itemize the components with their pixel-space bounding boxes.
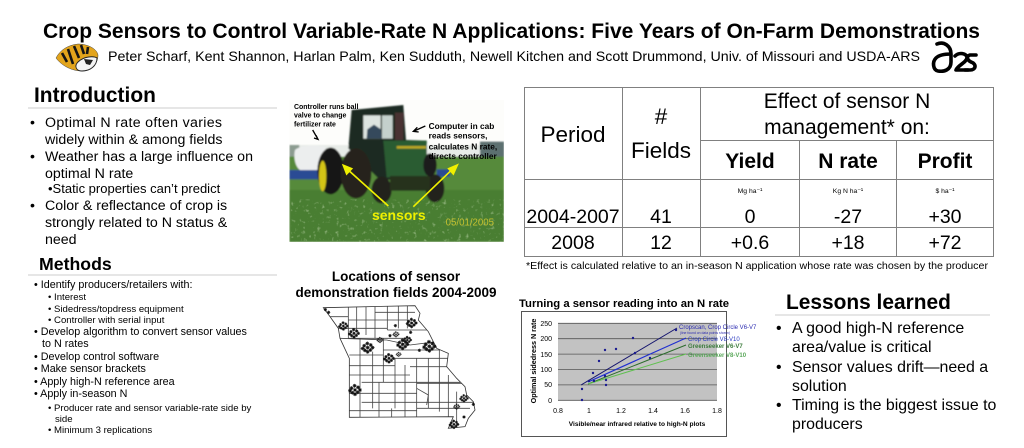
- table headers: #: [655, 104, 668, 129]
- table data: 12: [650, 232, 672, 254]
- methods text: • Producer rate and sensor variable-rate side by: [48, 403, 252, 414]
- chart: N rate vs sensor reading: 1: [587, 408, 591, 415]
- heading: introduction: Introduction: [34, 84, 156, 107]
- introduction text: optimal N rate: [45, 166, 133, 182]
- title: Crop Sensors to Control Variable-Rate N Applications: Five Years of On-Farm Demonstrations: [43, 19, 980, 43]
- lessons text: producers: [792, 416, 863, 433]
- table units: $ ha⁻¹: [935, 188, 955, 195]
- photo labels: [294, 104, 497, 223]
- trend lines: [581, 328, 686, 385]
- table data: +30: [928, 206, 962, 228]
- table data: -27: [834, 206, 862, 228]
- table data: [526, 206, 962, 254]
- methods text: [34, 279, 252, 436]
- gridlines: [558, 323, 717, 400]
- lessons text: •: [776, 397, 782, 414]
- introduction text: •Static properties can’t predict: [48, 181, 221, 196]
- lessons text: Sensor values drift—need a: [792, 359, 988, 376]
- lessons text: •: [776, 320, 782, 337]
- table units: [738, 188, 955, 195]
- methods text: • Sidedress/topdress equipment: [48, 304, 184, 315]
- map: Missouri sensor field locations: [323, 305, 475, 429]
- table headers: [540, 90, 972, 173]
- lessons text: area/value is critical: [792, 339, 932, 356]
- table headers: Period: [540, 122, 606, 147]
- chart: N rate vs sensor reading: [522, 312, 757, 436]
- chart: N rate vs sensor reading: Greenseeker V6-V7: [688, 344, 743, 350]
- introduction text: strongly related to N status &: [45, 215, 228, 231]
- axis labels: 250: [540, 321, 552, 328]
- introduction text: need: [45, 232, 77, 248]
- photo labels: valve to change: [294, 113, 347, 120]
- axis labels: 200: [540, 336, 552, 343]
- introduction text: [30, 115, 253, 248]
- table data: +18: [831, 232, 865, 254]
- table headers: Profit: [918, 150, 972, 173]
- chart: N rate vs sensor reading: 1.6: [680, 408, 690, 415]
- chart: N rate vs sensor reading: 0.8: [553, 408, 563, 415]
- photo labels: Computer in cab: [429, 121, 494, 131]
- table data: 2008: [551, 232, 595, 254]
- panel: methods: [28, 254, 277, 436]
- introduction text: •: [30, 115, 35, 131]
- axis labels: 50: [544, 382, 552, 389]
- table data: +72: [928, 232, 962, 254]
- photo labels: reads sensors,: [429, 131, 487, 141]
- chart: N rate vs sensor reading: Optimal sidedress N rate: [529, 319, 538, 403]
- line labels: Cropscan, Crop Circle V6-V7: [679, 325, 757, 331]
- methods text: • Apply high-N reference area: [34, 376, 175, 388]
- axis titles: Visible/near infrared relative to high-N plots: [569, 421, 706, 428]
- table headers: Fields: [631, 138, 691, 163]
- table data: 41: [650, 206, 672, 228]
- lessons text: solution: [792, 378, 847, 395]
- map heading: Locations of sensor: [332, 269, 461, 284]
- panel: lessons learned: [775, 291, 996, 433]
- state outline: [323, 306, 475, 428]
- methods text: • Develop algorithm to convert sensor values: [34, 326, 247, 338]
- table headers: N rate: [818, 150, 878, 173]
- photo labels: fertilizer rate: [294, 122, 336, 129]
- lessons text: A good high-N reference: [792, 320, 964, 337]
- axis labels: 0: [548, 398, 552, 405]
- introduction text: Color & reflectance of crop is: [45, 198, 227, 214]
- table units: Kg N ha⁻¹: [833, 188, 864, 195]
- introduction text: Optimal N rate often varies: [45, 115, 222, 131]
- table grid: [524, 87, 994, 257]
- methods text: side: [55, 414, 73, 425]
- chart heading: Turning a sensor reading into an N rate: [519, 298, 729, 310]
- chart: N rate vs sensor reading: (line found on data points shown): [680, 331, 730, 335]
- heading: methods: Methods: [39, 254, 112, 274]
- table headers: Effect of sensor N: [764, 90, 930, 113]
- methods text: • Minimum 3 replications: [48, 425, 152, 436]
- methods text: • Controller with serial input: [48, 315, 165, 326]
- table headers: management* on:: [764, 116, 930, 139]
- methods text: to N rates: [42, 338, 89, 350]
- photo: tractor with sensors: 05/01/2005: [446, 217, 494, 228]
- lessons text: [776, 320, 996, 433]
- axis labels: [540, 321, 552, 405]
- heading: lessons learned: Lessons learned: [786, 291, 951, 314]
- photo labels: directs controller: [429, 151, 497, 161]
- arrows: yellow sensor pointers: [343, 165, 457, 207]
- table footnote: *Effect is calculated relative to an in-season N application whose rate was chosen by the producer: [526, 261, 989, 272]
- chart: N rate vs sensor reading: 1.8: [712, 408, 722, 415]
- chart: N rate vs sensor reading: Greenseeker V8-V10: [688, 353, 747, 359]
- panel: results table: [524, 87, 994, 257]
- table data: 0: [745, 206, 756, 228]
- chart: N rate vs sensor reading: Crop Circle V8-V10: [688, 337, 740, 343]
- table headers: Yield: [725, 150, 775, 173]
- county lines: [330, 305, 473, 428]
- table units: Mg ha⁻¹: [738, 188, 763, 195]
- methods text: • Make sensor brackets: [34, 363, 146, 375]
- introduction text: •: [30, 198, 35, 214]
- lessons text: Timing is the biggest issue to: [792, 397, 996, 414]
- icon: ARS logo: [934, 43, 976, 71]
- table data: +0.6: [731, 232, 769, 254]
- map heading: [295, 269, 497, 300]
- photo labels: calculates N rate,: [429, 142, 497, 152]
- icon: Missouri tiger logo: [56, 44, 98, 71]
- chart: N rate vs sensor reading: 1.4: [648, 408, 658, 415]
- introduction text: widely within & among fields: [44, 132, 222, 148]
- panel: introduction: [28, 84, 277, 248]
- axis labels: 100: [540, 367, 552, 374]
- arrows: black callout pointers: [313, 126, 425, 139]
- axis labels: 150: [540, 352, 552, 359]
- lessons text: •: [776, 359, 782, 376]
- methods text: • Apply in-season N: [34, 388, 127, 400]
- introduction text: Weather has a large influence on: [45, 149, 253, 165]
- table data: 2004-2007: [526, 206, 620, 228]
- photo: tractor with sensors: [289, 100, 504, 242]
- data points: [581, 329, 677, 401]
- field location markers: [324, 308, 475, 429]
- chart: N rate vs sensor reading: 1.2: [616, 408, 626, 415]
- methods text: • Develop control software: [34, 351, 159, 363]
- methods text: • Identify producers/retailers with:: [34, 279, 193, 291]
- introduction text: •: [30, 149, 35, 165]
- map heading: demonstration fields 2004-2009: [295, 285, 497, 300]
- methods text: • Interest: [48, 292, 86, 303]
- photo labels: sensors: [372, 207, 426, 223]
- photo labels: Controller runs ball: [294, 104, 358, 111]
- authors line: Peter Scharf, Kent Shannon, Harlan Palm, Ken Sudduth, Newell Kitchen and Scott Drummond, Univ. of Missouri and USDA-ARS: [108, 48, 920, 64]
